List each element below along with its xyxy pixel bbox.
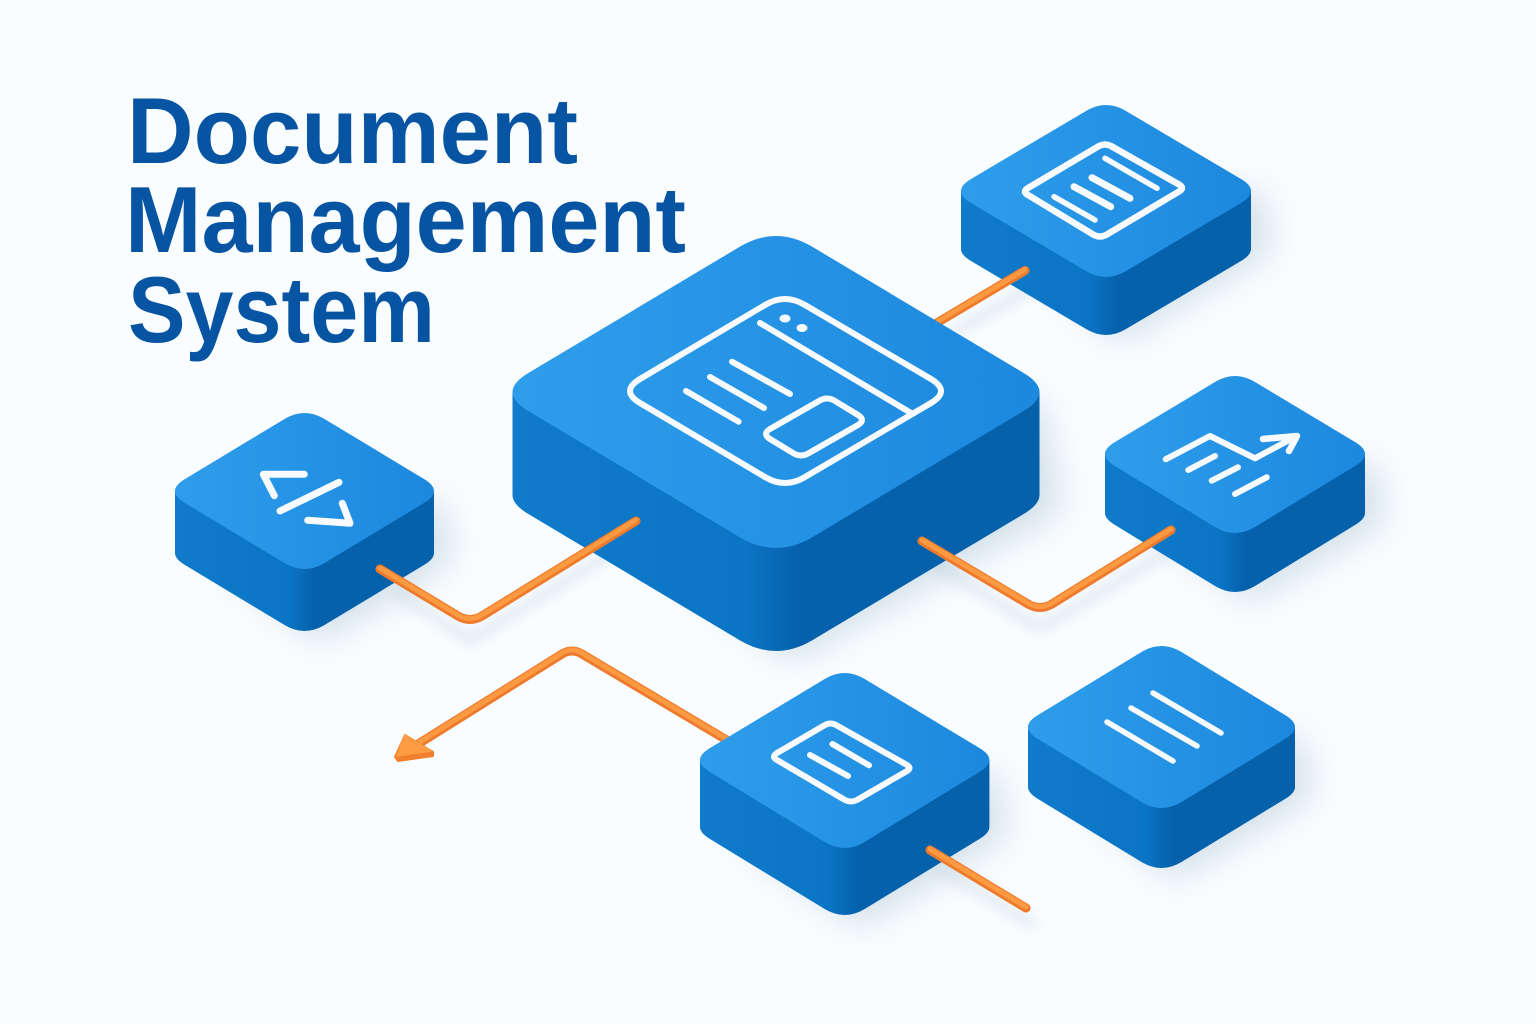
ground shadows <box>220 190 1385 925</box>
top face <box>1028 646 1295 808</box>
icon: document <box>1025 144 1182 236</box>
top face <box>1105 376 1365 533</box>
block: central main <box>512 236 1040 651</box>
top face <box>961 105 1251 277</box>
side faces <box>1105 454 1365 592</box>
top face <box>700 673 989 848</box>
block: bottom-middle document <box>700 673 989 915</box>
connector: bottom block outward stub <box>930 849 1026 908</box>
block: left code <box>175 413 434 631</box>
connector shadows <box>395 285 1180 925</box>
side faces <box>961 191 1251 335</box>
connector: main block to right block <box>922 529 1171 608</box>
block: bottom-right list <box>1028 646 1295 868</box>
side faces <box>175 491 434 631</box>
side faces <box>512 392 1040 651</box>
title <box>125 78 686 362</box>
icon: code brackets <box>263 474 350 523</box>
connector: left block to main block <box>380 520 636 620</box>
icon: small document <box>774 724 910 802</box>
icon: three lines <box>1107 693 1221 761</box>
title: Document <box>127 78 578 183</box>
side faces <box>700 760 989 915</box>
connector: main block to top-right block <box>930 270 1025 327</box>
icon: browser window <box>630 299 941 483</box>
block: top-right document <box>961 105 1251 335</box>
icon: trend arrow <box>1166 436 1297 494</box>
arrow: connector from bottom block to arrowhead <box>395 650 735 761</box>
arrowhead <box>395 735 433 761</box>
top face <box>175 413 434 569</box>
block: right chart <box>1105 376 1365 592</box>
title: Management <box>125 167 686 272</box>
top face <box>512 236 1040 548</box>
title: System <box>128 257 435 362</box>
side faces <box>1028 727 1295 868</box>
